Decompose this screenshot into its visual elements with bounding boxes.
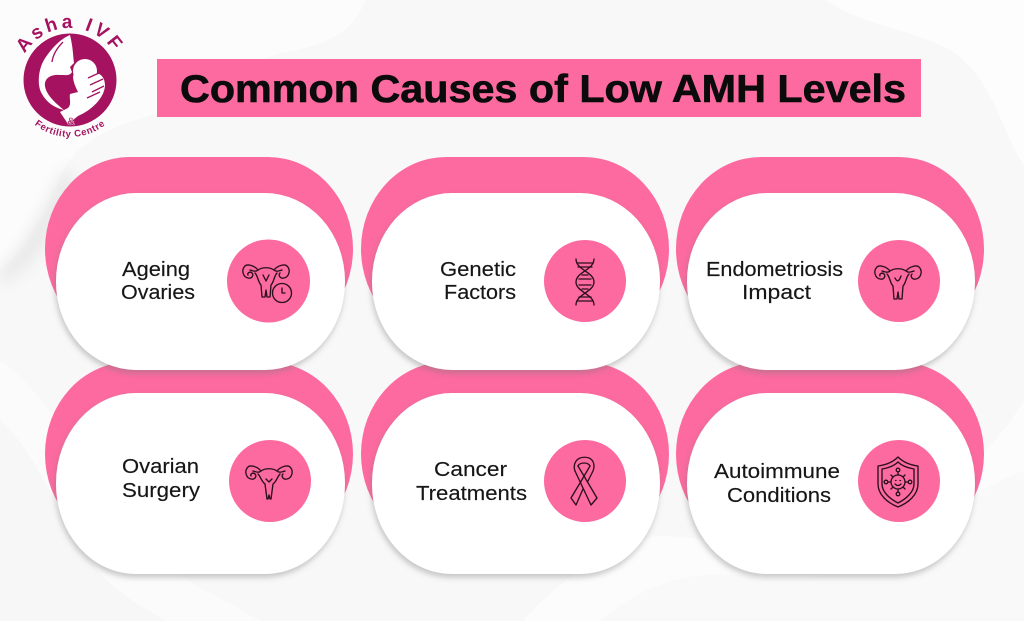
card: Cancer Treatments (372, 393, 660, 574)
icon: uterus with clock (243, 265, 292, 302)
logo hair and baby details (52, 42, 104, 98)
card: Autoimmune Conditions (687, 393, 975, 574)
icon circle (858, 240, 940, 322)
label: Conditions (727, 485, 831, 507)
logo tagline: Fertility Centre (35, 120, 104, 139)
label: Impact (742, 282, 811, 304)
label: Genetic (440, 259, 516, 281)
title banner (157, 59, 921, 117)
card: Ageing Ovaries (56, 193, 345, 370)
card: Ovarian Surgery (56, 393, 345, 574)
title: Common Causes of Low AMH Levels (180, 68, 906, 111)
label: Ageing (122, 259, 190, 281)
label: Surgery (122, 480, 200, 502)
icon: awareness ribbon (571, 457, 597, 505)
label: Endometriosis (706, 259, 843, 281)
pink card backs (45, 157, 984, 546)
label: Treatments (416, 483, 527, 505)
icon circle (544, 240, 626, 322)
icon circle (858, 440, 940, 522)
label: Factors (444, 282, 516, 304)
logo curved name: Asha IVF (18, 18, 124, 54)
icon circle (544, 440, 626, 522)
logo: Asha IVF Fertility Centre (18, 18, 124, 139)
icon circle (227, 240, 310, 322)
label: Ovarian (122, 456, 199, 478)
icon: DNA helix (576, 259, 594, 305)
logo ampersand: & (67, 116, 75, 128)
icon circle (229, 440, 311, 522)
icon: uterus (875, 266, 921, 299)
card: Endometriosis Impact (687, 193, 975, 370)
logo emblem circle (24, 34, 116, 126)
logo mother and baby silhouette (39, 35, 105, 124)
card: Genetic Factors (372, 193, 660, 370)
label: Cancer (434, 459, 507, 481)
label: Ovaries (121, 282, 195, 304)
label: Autoimmune (714, 461, 840, 483)
icon: uterus (246, 466, 292, 499)
icon: shield with virus (878, 457, 918, 507)
